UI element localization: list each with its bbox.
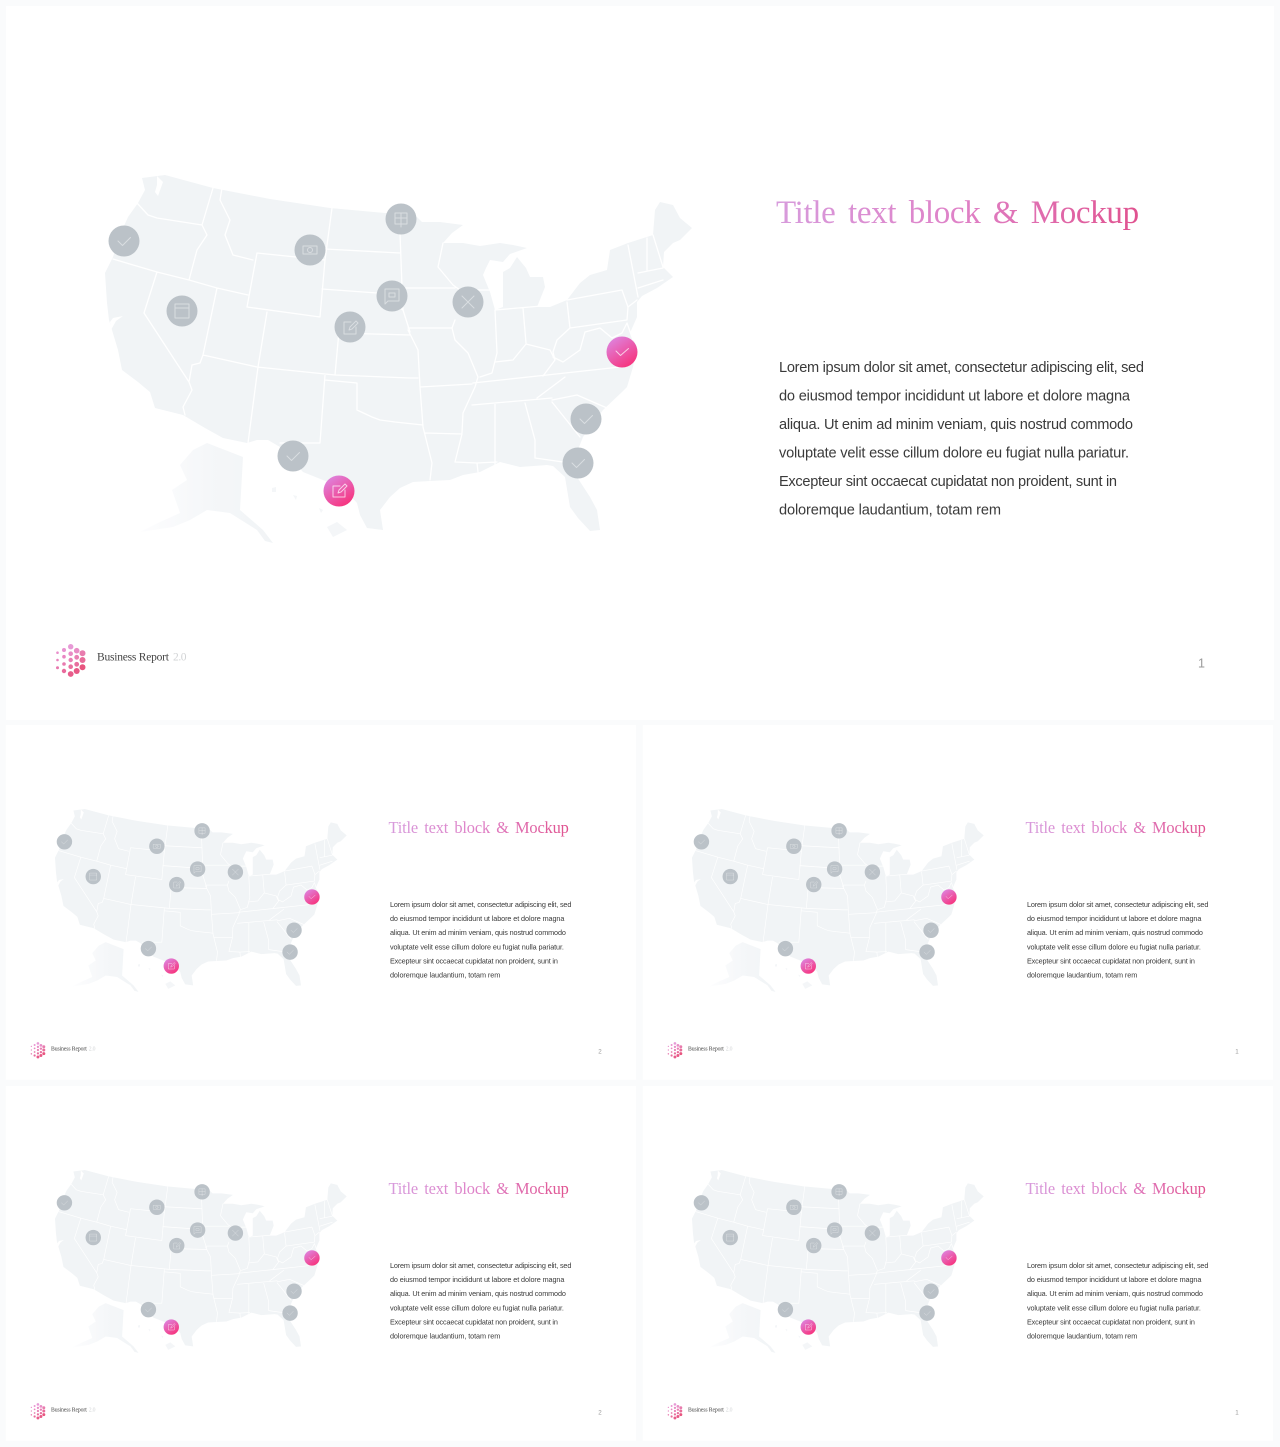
page number, slide 3: 1 xyxy=(1235,1049,1239,1056)
logo, slide 5 xyxy=(668,1403,682,1419)
pin: money, Montana xyxy=(294,234,326,266)
brand name: Business Report xyxy=(97,652,170,664)
map and pins, slide 4 xyxy=(55,1170,347,1353)
body text: voluptate velit esse cillum dolore eu fugiat nulla pariatur. xyxy=(779,446,1129,462)
pin: check, Washington xyxy=(108,226,140,256)
map: Hawaii xyxy=(272,487,347,537)
body text: do eiusmod tempor incididunt ut labore et dolore magna xyxy=(779,388,1131,404)
body text, slide 5: voluptate velit esse cillum dolore eu fugiat nulla pariatur. xyxy=(1027,1303,1201,1312)
body text, slide 2: voluptate velit esse cillum dolore eu fugiat nulla pariatur. xyxy=(390,942,564,951)
brand name, slide 3: Business Report xyxy=(688,1046,724,1052)
body text, slide 4 xyxy=(390,1261,571,1341)
body text: Excepteur sint occaecat cupidatat non proident, sunt in xyxy=(779,474,1117,490)
pin: highlighted check, Virginia xyxy=(606,336,638,368)
title, slide 5: Title text block & Mockup xyxy=(1025,1179,1206,1198)
page number: 1 xyxy=(1198,656,1205,670)
pin: check, Georgia xyxy=(562,448,594,478)
body text, slide 5 xyxy=(1027,1261,1208,1341)
body text, slide 4: voluptate velit esse cillum dolore eu fugiat nulla pariatur. xyxy=(390,1303,564,1312)
body text, slide 2: Excepteur sint occaecat cupidatat non proident, sunt in xyxy=(390,957,558,966)
brand name, slide 2: Business Report xyxy=(51,1046,87,1052)
body text, slide 3: do eiusmod tempor incididunt ut labore et dolore magna xyxy=(1027,914,1202,923)
logo, slide 4 xyxy=(31,1403,45,1419)
pin: edit, Kansas xyxy=(334,312,366,342)
body text, slide 3: voluptate velit esse cillum dolore eu fugiat nulla pariatur. xyxy=(1027,942,1201,951)
body text, slide 3: Excepteur sint occaecat cupidatat non proident, sunt in xyxy=(1027,957,1195,966)
brand version, slide 5: 2.0 xyxy=(726,1407,733,1413)
body text, slide 5: Excepteur sint occaecat cupidatat non proident, sunt in xyxy=(1027,1318,1195,1327)
page number, slide 2: 2 xyxy=(598,1049,602,1056)
body text, slide 4: do eiusmod tempor incididunt ut labore et dolore magna xyxy=(390,1275,565,1284)
panel: slide 3 xyxy=(643,725,1273,1080)
map and pins, slide 3 xyxy=(692,809,984,992)
body text, slide 5: aliqua. Ut enim ad minim veniam, quis nostrud commodo xyxy=(1027,1289,1203,1298)
panel: main slide xyxy=(6,6,1274,720)
body text, slide 3: aliqua. Ut enim ad minim veniam, quis nostrud commodo xyxy=(1027,928,1203,937)
brand version, slide 4: 2.0 xyxy=(89,1407,96,1413)
logo icon xyxy=(56,644,86,677)
title, slide 4: Title text block & Mockup xyxy=(388,1179,569,1198)
panel: slide 2 xyxy=(6,725,636,1080)
pin: check, South Carolina xyxy=(570,404,602,434)
pin: window, Nevada xyxy=(166,296,198,326)
title, slide 2: Title text block & Mockup xyxy=(388,818,569,837)
map: Alaska xyxy=(140,443,273,543)
pin: slides, Minnesota xyxy=(386,204,416,234)
body text, slide 5: do eiusmod tempor incididunt ut labore et dolore magna xyxy=(1027,1275,1202,1284)
body text, slide 4: aliqua. Ut enim ad minim veniam, quis nostrud commodo xyxy=(390,1289,566,1298)
pin: highlighted edit, South Texas xyxy=(324,476,354,506)
body text: aliqua. Ut enim ad minim veniam, quis nostrud commodo xyxy=(779,417,1133,433)
body text, slide 5: doloremque laudantium, totam rem xyxy=(1027,1332,1137,1341)
body text, slide 4: Lorem ipsum dolor sit amet, consectetur adipiscing elit, sed xyxy=(390,1261,571,1270)
logo, slide 2 xyxy=(31,1042,45,1058)
body text, slide 2: do eiusmod tempor incididunt ut labore et dolore magna xyxy=(390,914,565,923)
pin: cross, Illinois xyxy=(452,286,484,318)
brand version, slide 2: 2.0 xyxy=(89,1046,96,1052)
location pins xyxy=(108,204,638,506)
logo, slide 3 xyxy=(668,1042,682,1058)
brand name, slide 5: Business Report xyxy=(688,1407,724,1413)
map: United States xyxy=(105,175,692,543)
body text, slide 4: Excepteur sint occaecat cupidatat non proident, sunt in xyxy=(390,1318,558,1327)
body text, slide 2: aliqua. Ut enim ad minim veniam, quis nostrud commodo xyxy=(390,928,566,937)
body text xyxy=(779,360,1144,518)
title, slide 3: Title text block & Mockup xyxy=(1025,818,1206,837)
brand version: 2.0 xyxy=(173,652,187,664)
pin: check, West Texas xyxy=(278,440,308,472)
body text: doloremque laudantium, totam rem xyxy=(779,502,1001,518)
map: state borders xyxy=(113,188,663,480)
brand version, slide 3: 2.0 xyxy=(726,1046,733,1052)
map: bay inlets xyxy=(110,176,163,330)
page number, slide 5: 1 xyxy=(1235,1410,1239,1417)
body text, slide 3: Lorem ipsum dolor sit amet, consectetur adipiscing elit, sed xyxy=(1027,900,1208,909)
body text, slide 2 xyxy=(390,900,571,980)
title: Title text block & Mockup xyxy=(776,195,1139,231)
map and pins, slide 2 xyxy=(55,809,347,992)
panel: slide 4 xyxy=(6,1086,636,1441)
brand name, slide 4: Business Report xyxy=(51,1407,87,1413)
body text, slide 3 xyxy=(1027,900,1208,980)
pin: chat, South Dakota xyxy=(376,280,408,312)
map and pins, slide 5 xyxy=(692,1170,984,1353)
body text, slide 2: Lorem ipsum dolor sit amet, consectetur adipiscing elit, sed xyxy=(390,900,571,909)
body text: Lorem ipsum dolor sit amet, consectetur adipiscing elit, sed xyxy=(779,360,1144,376)
body text, slide 2: doloremque laudantium, totam rem xyxy=(390,971,500,980)
body text, slide 3: doloremque laudantium, totam rem xyxy=(1027,971,1137,980)
panel: slide 5 xyxy=(643,1086,1273,1441)
body text, slide 4: doloremque laudantium, totam rem xyxy=(390,1332,500,1341)
body text, slide 5: Lorem ipsum dolor sit amet, consectetur adipiscing elit, sed xyxy=(1027,1261,1208,1270)
page number, slide 4: 2 xyxy=(598,1410,602,1417)
